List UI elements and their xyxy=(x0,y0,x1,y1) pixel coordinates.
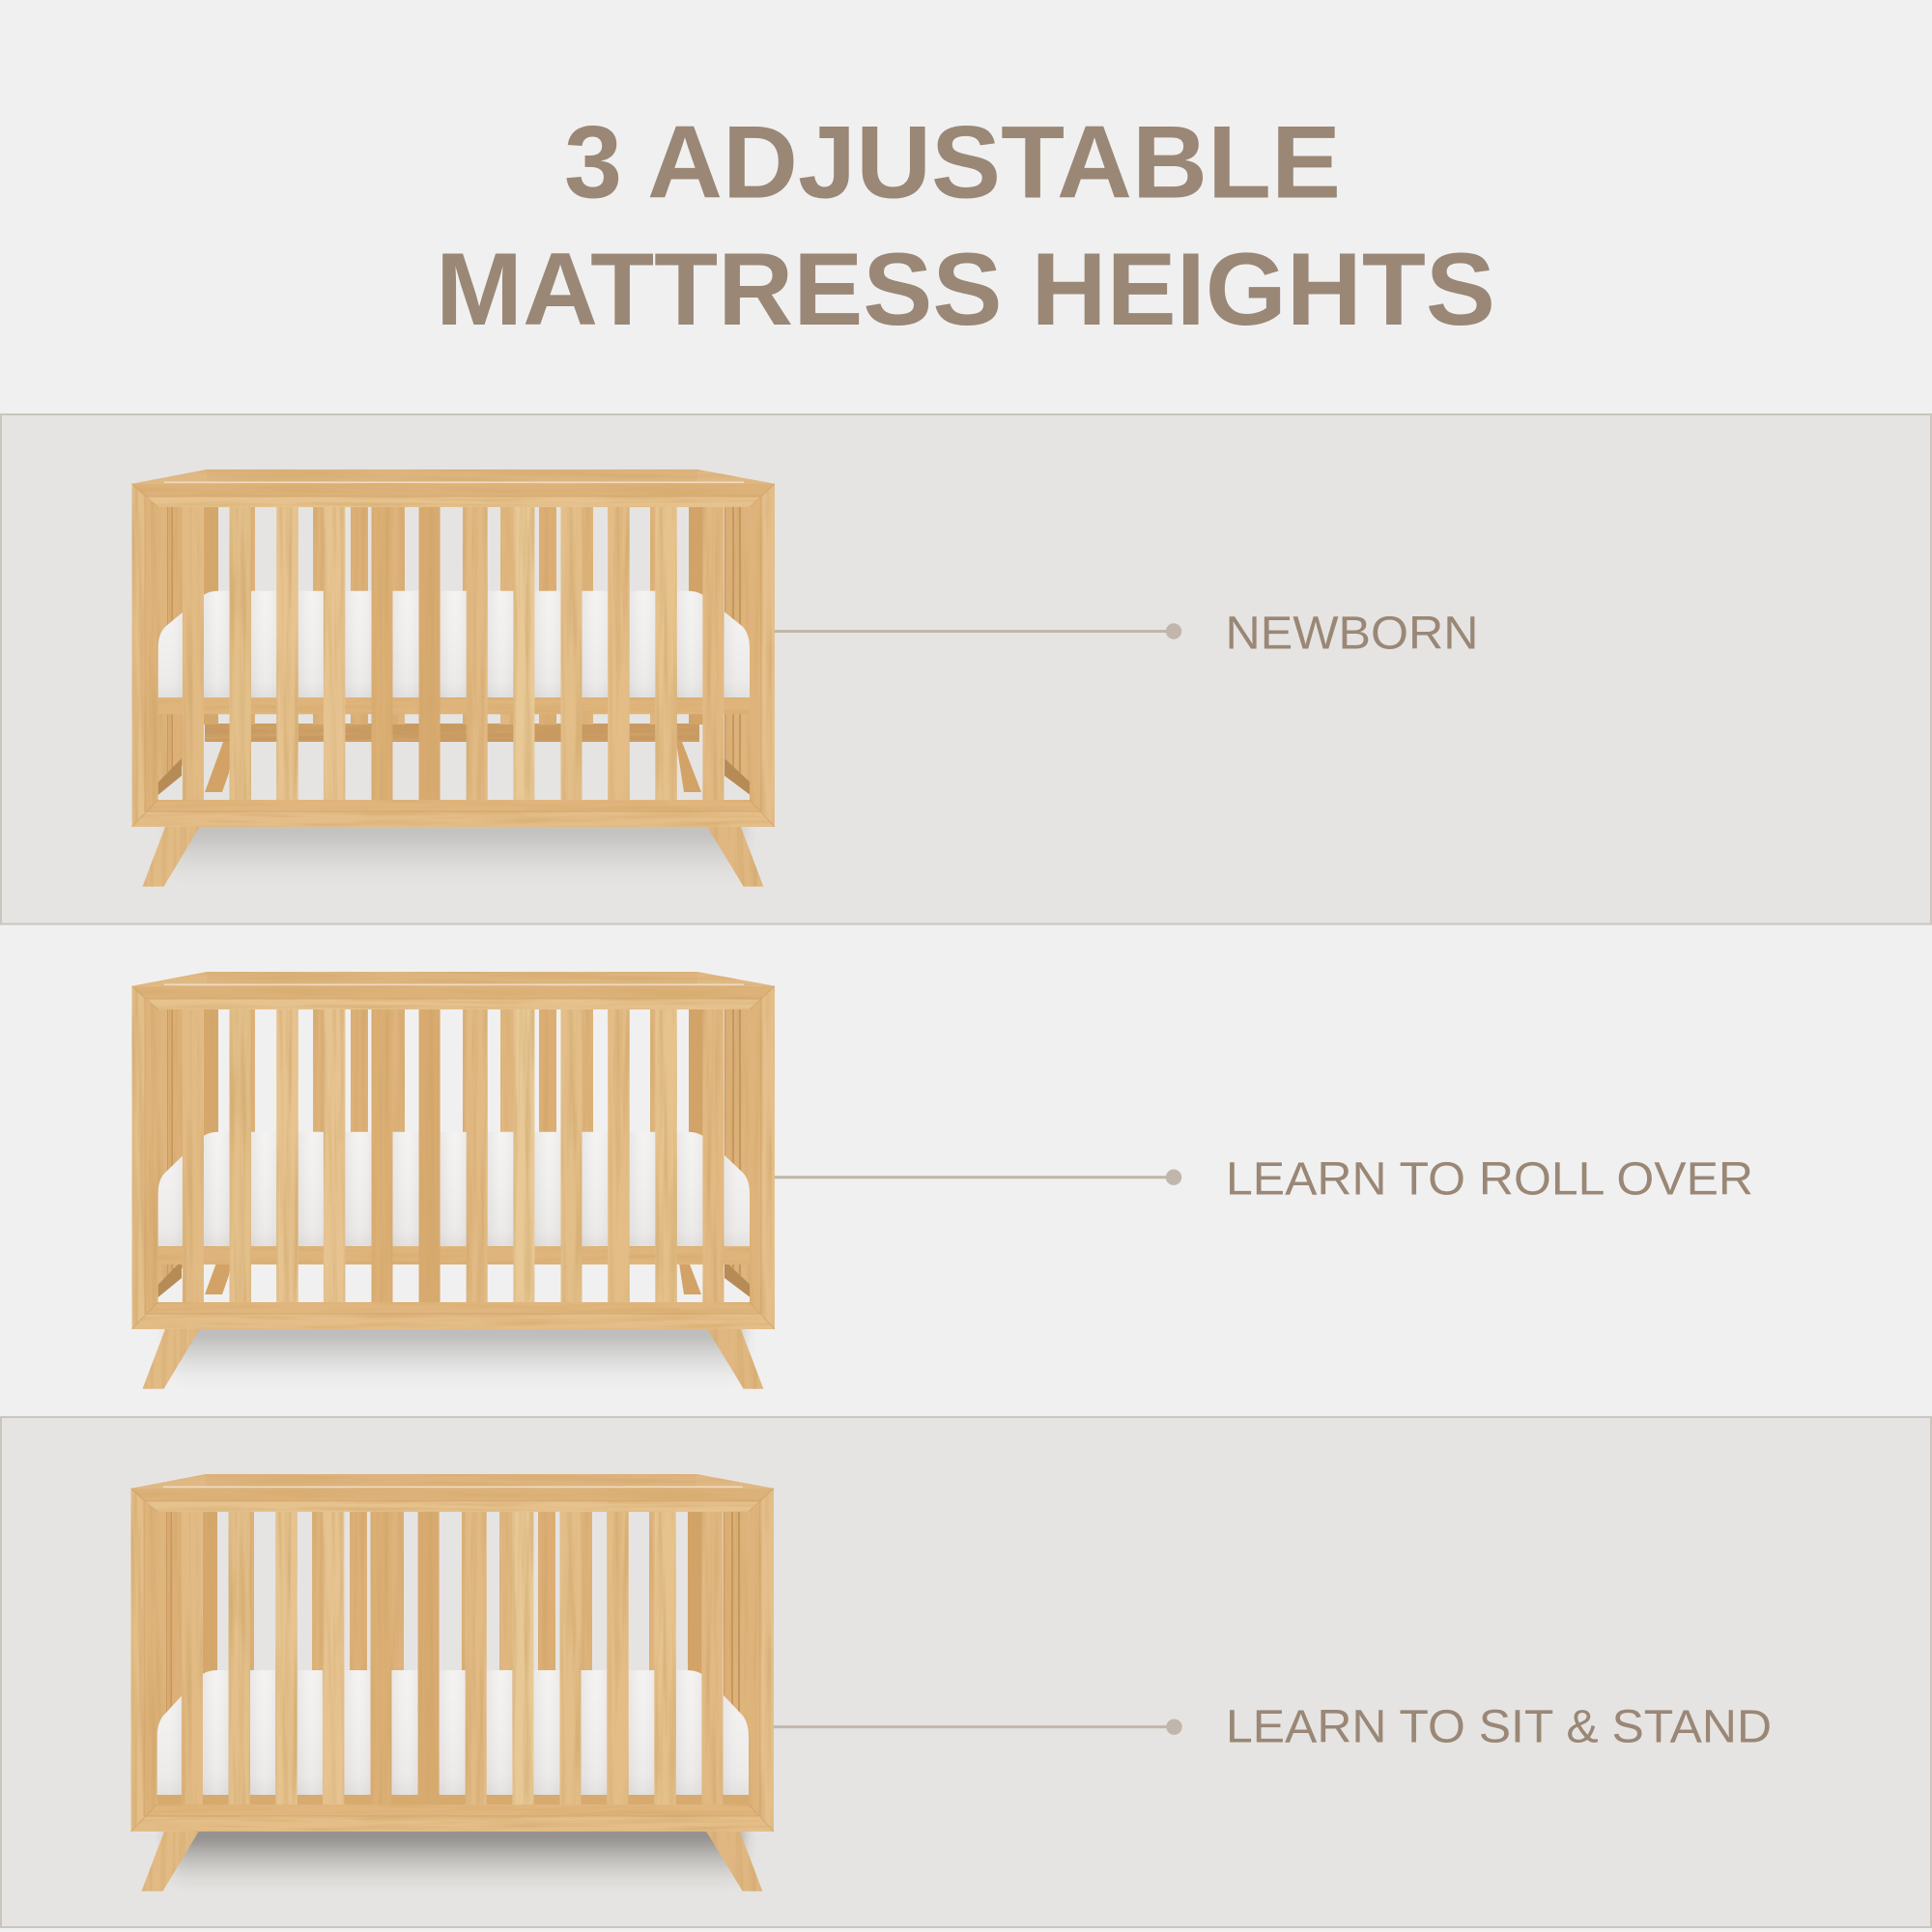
leader line xyxy=(775,630,1174,633)
leader dot xyxy=(1166,1719,1182,1735)
crib back frame and slats xyxy=(131,469,775,795)
crib front frame, slats and legs xyxy=(131,986,775,1389)
callout: learn to roll over xyxy=(775,1153,1753,1206)
leader dot xyxy=(1166,1169,1181,1185)
floor shadow xyxy=(171,1824,741,1884)
callout: newborn xyxy=(775,608,1478,660)
crib back frame and slats xyxy=(131,1474,774,1800)
title: MATTRESS HEIGHTS xyxy=(436,231,1495,347)
mattress: lowest position xyxy=(156,1670,749,1795)
mattress support rail xyxy=(158,1246,751,1264)
leader dot xyxy=(1166,623,1181,639)
mattress: middle position xyxy=(158,1132,750,1246)
crib front frame, slats and legs xyxy=(131,1489,774,1891)
mattress support rail xyxy=(157,1795,750,1806)
title xyxy=(436,103,1495,347)
mattress: highest position xyxy=(158,591,750,697)
crib: newborn mattress height xyxy=(131,469,775,887)
crib: roll over mattress height xyxy=(131,972,775,1389)
callout: learn to sit and stand xyxy=(774,1700,1772,1752)
crib front frame, slats and legs xyxy=(131,484,775,887)
crib: sit and stand mattress height xyxy=(131,1474,774,1891)
floor shadow xyxy=(172,1321,742,1381)
leader line xyxy=(774,1725,1174,1728)
label: LEARN TO SIT & STAND xyxy=(1226,1700,1772,1752)
leader line xyxy=(775,1176,1174,1179)
floor shadow xyxy=(172,819,742,879)
panel: learn to sit and stand band xyxy=(1,1417,1931,1927)
title: 3 ADJUSTABLE xyxy=(564,103,1341,219)
crib back frame and slats xyxy=(131,972,775,1297)
panel: newborn band xyxy=(1,414,1931,923)
label: LEARN TO ROLL OVER xyxy=(1226,1153,1753,1206)
mattress support rail xyxy=(158,697,751,714)
label: NEWBORN xyxy=(1225,608,1478,660)
